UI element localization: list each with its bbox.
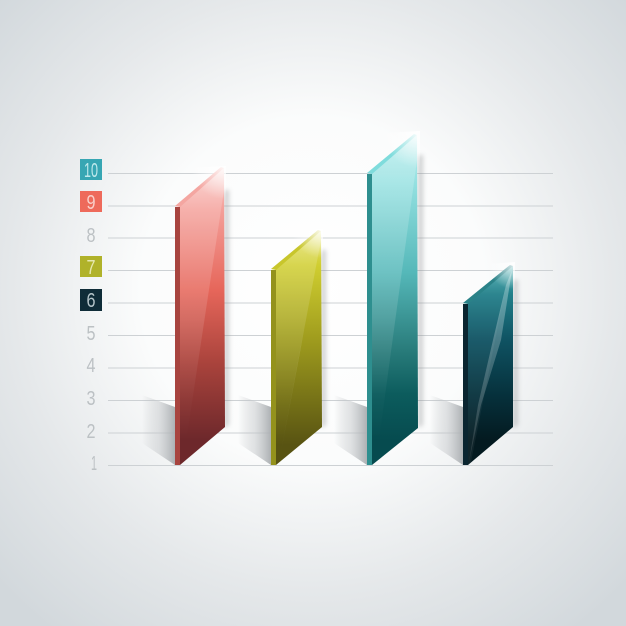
label 7: 7 xyxy=(86,257,96,279)
top edge xyxy=(463,265,513,304)
label 4: 4 xyxy=(86,355,96,377)
top edge xyxy=(367,134,417,174)
label 10: 10 xyxy=(84,160,98,182)
floor shadow xyxy=(238,395,271,465)
label 10 xyxy=(80,159,102,182)
label 2: 2 xyxy=(86,421,96,443)
red bar xyxy=(142,166,229,465)
label 6 xyxy=(80,289,102,312)
side face xyxy=(463,304,468,465)
grid lines xyxy=(108,174,553,466)
front face xyxy=(372,135,418,465)
floor shadow xyxy=(142,395,175,465)
top edge xyxy=(175,167,224,207)
label 6: 6 xyxy=(86,290,96,312)
top edge xyxy=(271,230,321,270)
teal bar xyxy=(334,131,423,465)
side face xyxy=(271,270,276,465)
label 5: 5 xyxy=(86,323,96,345)
label 1: 1 xyxy=(91,453,97,475)
front face xyxy=(468,266,513,465)
label 8: 8 xyxy=(86,225,96,247)
dark bar xyxy=(430,262,518,465)
olive bar xyxy=(238,229,326,465)
side face xyxy=(175,207,180,465)
floor shadow xyxy=(334,395,367,465)
axis labels xyxy=(80,159,102,475)
front face xyxy=(180,168,225,465)
label 9 xyxy=(80,191,102,214)
label 3: 3 xyxy=(86,388,96,410)
label 7 xyxy=(80,256,102,279)
side face xyxy=(367,174,372,465)
label 9: 9 xyxy=(86,192,96,214)
front face xyxy=(276,231,322,465)
floor shadow xyxy=(430,395,463,465)
